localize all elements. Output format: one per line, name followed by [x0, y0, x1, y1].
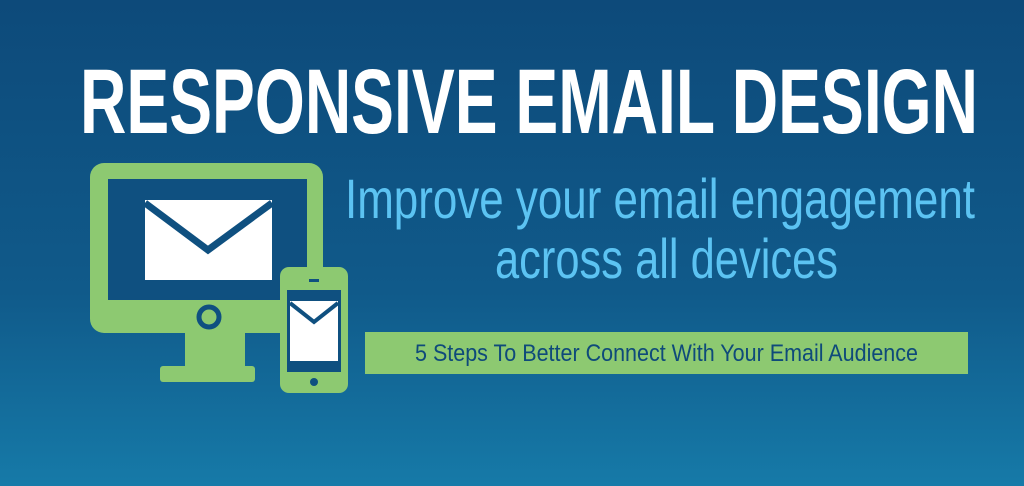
subtitle — [345, 167, 975, 290]
banner: 5 steps — [365, 332, 968, 374]
banner: 5 steps: 5 Steps To Better Connect With Your Email Audience — [415, 340, 918, 367]
subtitle: across all devices — [495, 227, 838, 290]
icon: desktop monitor with email — [90, 163, 323, 382]
icon: phone with email — [280, 267, 348, 393]
